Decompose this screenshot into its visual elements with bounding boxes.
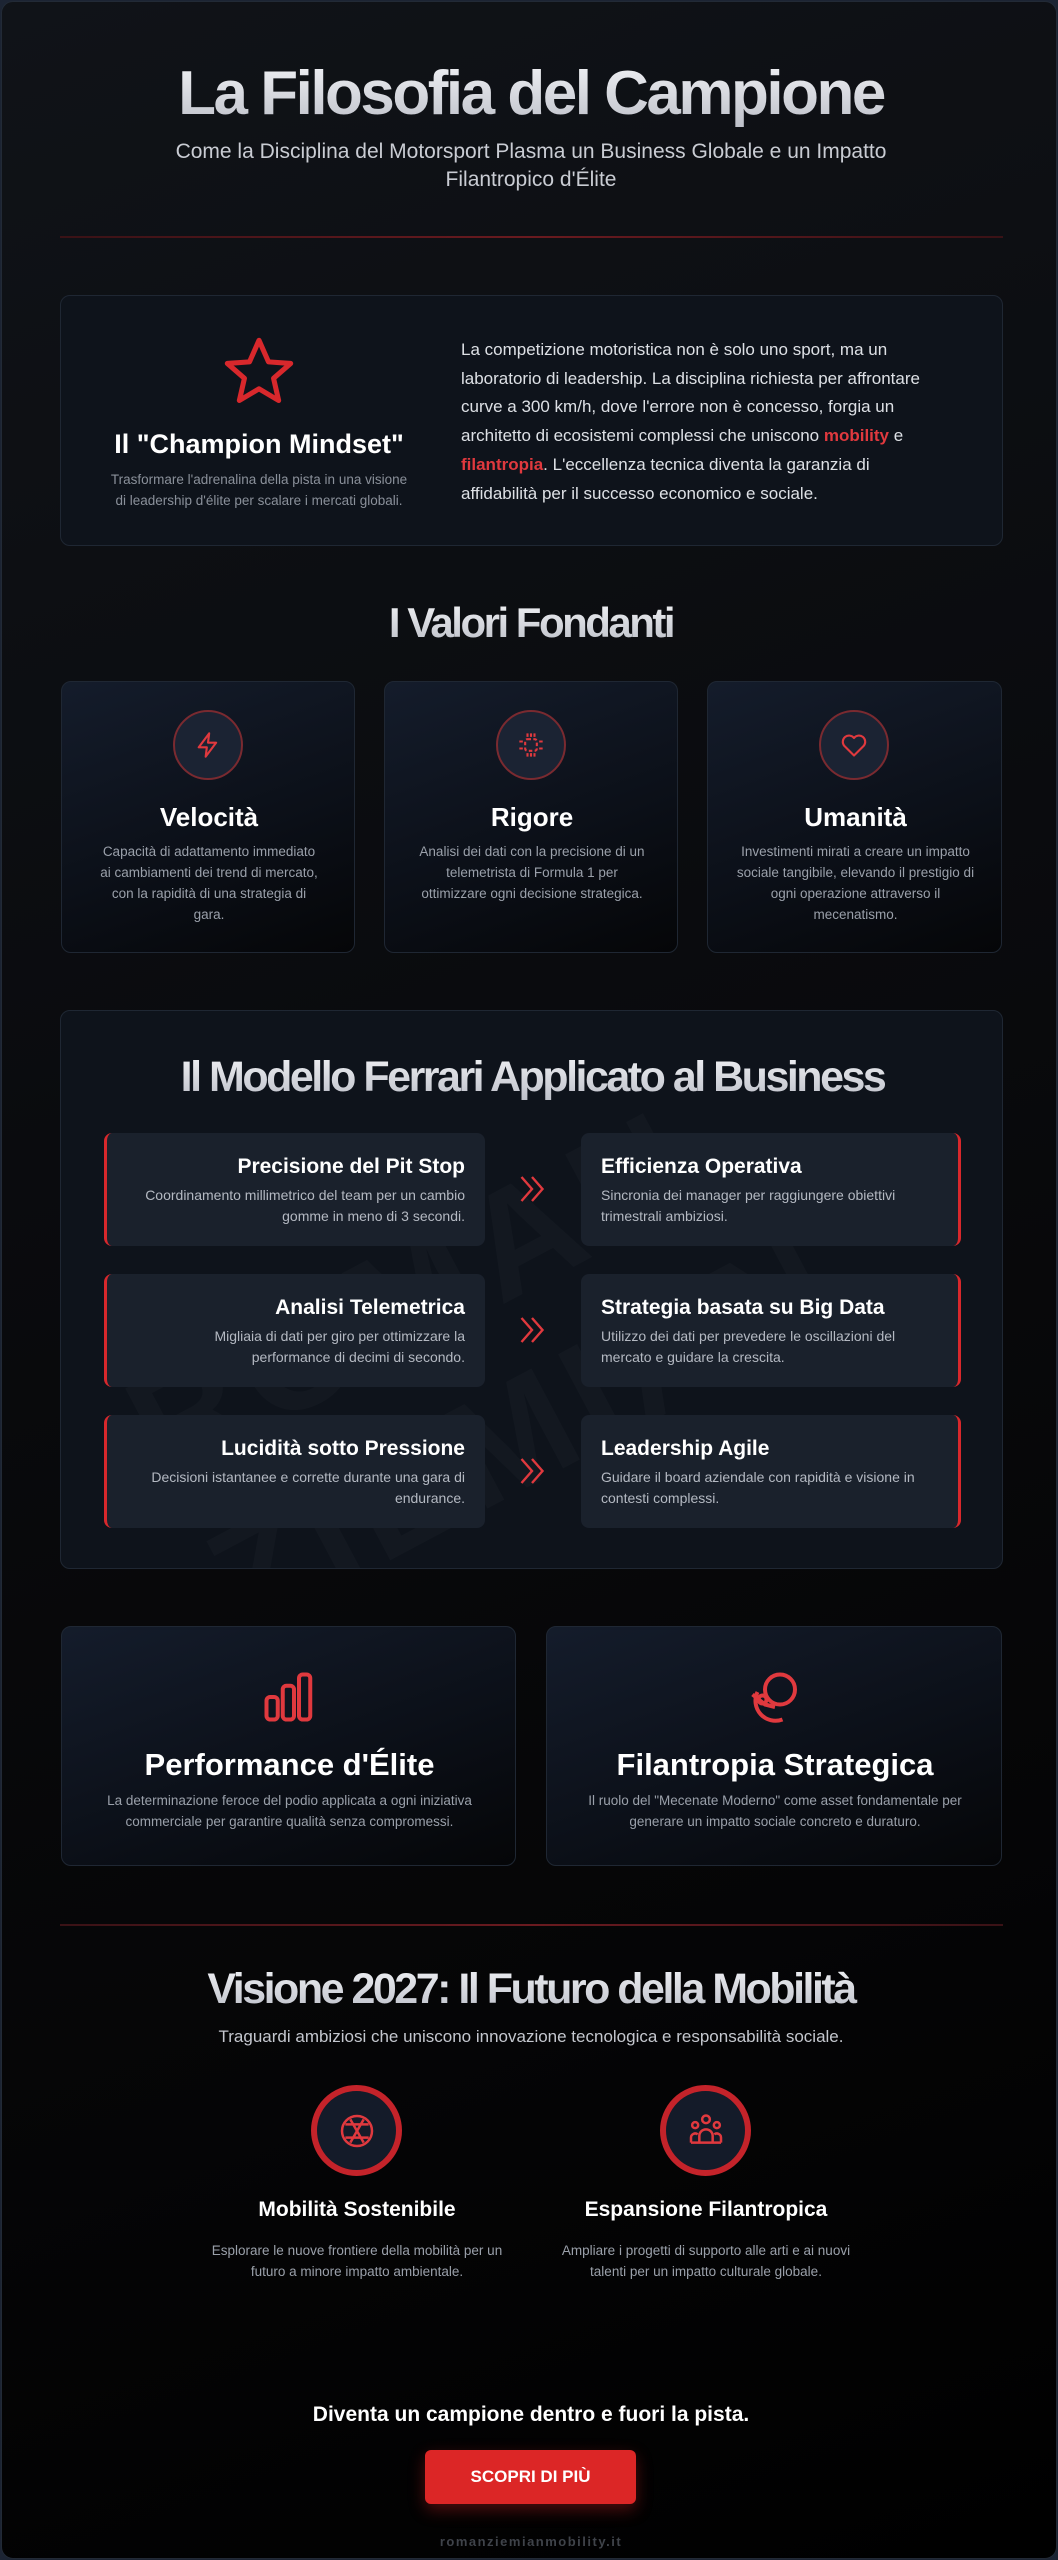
title xyxy=(2,56,1058,132)
subtitle: Come la Disciplina del Motorsport Plasma un Business Globale e un Impatto Filantropico d'Élite xyxy=(176,140,886,191)
icon: globe hand xyxy=(751,1672,797,1723)
title: La Filosofia del Campione xyxy=(178,59,884,128)
icon: heart xyxy=(819,710,889,780)
row 3 left: Decisioni istantanee e corrette durante una gara di endurance. xyxy=(151,1469,465,1506)
row 2 right: Utilizzo dei dati per prevedere le oscillazioni del mercato e guidare la crescita. xyxy=(601,1328,895,1365)
button: scopri di più xyxy=(425,2450,636,2504)
row 1 right: Efficienza Operativa xyxy=(601,1155,802,1178)
cta text: Diventa un campione dentro e fuori la pista. xyxy=(313,2403,749,2426)
icon circle xyxy=(660,2085,751,2176)
title: Rigore xyxy=(491,802,573,832)
title: Umanità xyxy=(804,802,907,832)
panel: rigore xyxy=(384,681,678,953)
desc: Esplorare le nuove frontiere della mobilità per un futuro a minore impatto ambientale. xyxy=(212,2243,502,2279)
row 3 left: Lucidità sotto Pressione xyxy=(221,1437,465,1460)
panel: umanità xyxy=(707,681,1002,953)
goal: mobilità sostenibile xyxy=(212,2085,502,2279)
row 2 right: Strategia basata su Big Data xyxy=(601,1296,885,1319)
arrow 3 xyxy=(520,1458,544,1484)
row 1 right xyxy=(581,1133,961,1246)
desc: Ampliare i progetti di supporto alle arti e ai nuovi talenti per un impatto culturale globale. xyxy=(562,2243,850,2279)
text: champion sub: Trasformare l'adrenalina della pista in una visione di leadership d'élite per scalare i mercati globali. xyxy=(111,472,407,508)
row 2 right xyxy=(581,1274,961,1387)
icon: bolt xyxy=(173,710,243,780)
panel: velocità xyxy=(61,681,355,953)
title: Performance d'Élite xyxy=(145,1747,434,1782)
row 3 left xyxy=(104,1415,485,1528)
heading: visione 2027: Visione 2027: Il Futuro della Mobilità xyxy=(207,1965,855,2013)
row 1 left xyxy=(104,1133,485,1246)
watermark xyxy=(100,1040,869,1668)
desc: La determinazione feroce del podio applicata a ogni iniziativa commerciale per garantire qualità senza compromessi. xyxy=(107,1793,472,1829)
heading: visione 2027 xyxy=(2,1963,1058,2015)
icon circle xyxy=(311,2085,402,2176)
title: Espansione Filantropica xyxy=(585,2198,827,2221)
arrow 1 xyxy=(520,1176,544,1202)
row 1 left: Precisione del Pit Stop xyxy=(237,1155,465,1178)
heading: valori: I Valori Fondanti xyxy=(389,599,673,646)
panel: modello ferrari xyxy=(60,1010,1003,1569)
title: Filantropia Strategica xyxy=(617,1747,933,1782)
text: champion body: La competizione motoristica non è solo uno sport, ma un laboratorio di leadership. La disciplina richiesta per affrontare curve a 300 km/h, dove l'errore non è concesso, forgia un architetto di ecosistemi complessi che uniscono mobility e filantropia. L'eccellenza tecnica diventa la garanzia di affidabilità per il successo economico e sociale. xyxy=(461,340,920,503)
title: Mobilità Sostenibile xyxy=(258,2198,456,2221)
row 3 right: Leadership Agile xyxy=(601,1437,769,1460)
row 3 right xyxy=(581,1415,961,1528)
watermark: ROMAN xyxy=(101,1075,724,1513)
goal: espansione filantropica xyxy=(562,2085,850,2279)
subtitle: visione: Traguardi ambiziosi che uniscono innovazione tecnologica e responsabilità sociale. xyxy=(219,2027,843,2046)
icon: cpu xyxy=(496,710,566,780)
row 2 left: Migliaia di dati per giro per ottimizzare la performance di decimi di secondo. xyxy=(214,1328,465,1365)
icon: bars xyxy=(264,1672,312,1722)
panel: performance xyxy=(61,1626,516,1866)
row 2 left: Analisi Telemetrica xyxy=(275,1296,465,1319)
arrow 2 xyxy=(520,1317,544,1343)
footer: romanziemianmobility.it xyxy=(440,2534,622,2549)
row 3 right: Guidare il board aziendale con rapidità e visione in contesti complessi. xyxy=(601,1469,915,1506)
heading: champion mindset: Il "Champion Mindset" xyxy=(114,429,404,459)
row 1 left: Coordinamento millimetrico del team per un cambio gomme in meno di 3 secondi. xyxy=(145,1187,465,1224)
desc: Capacità di adattamento immediato ai cambiamenti dei trend di mercato, con la rapidità di una strategia di gara. xyxy=(100,844,318,922)
desc: Analisi dei dati con la precisione di un telemetrista di Formula 1 per ottimizzare ogni decisione strategica. xyxy=(419,844,645,901)
title: Velocità xyxy=(160,802,258,832)
icon: star xyxy=(224,338,294,403)
desc: Investimenti mirati a creare un impatto sociale tangibile, elevando il prestigio di ogni operazione attraverso il mecenatismo. xyxy=(737,844,974,922)
heading: valori xyxy=(2,598,1058,648)
row 2 left xyxy=(104,1274,485,1387)
panel: filantropia xyxy=(546,1626,1002,1866)
button: scopri di più: SCOPRI DI PIÙ xyxy=(471,2467,590,2486)
desc: Il ruolo del "Mecenate Moderno" come asset fondamentale per generare un impatto sociale concreto e duraturo. xyxy=(588,1793,962,1829)
panel: champion mindset xyxy=(60,295,1003,546)
heading xyxy=(61,1051,1004,1103)
heading: Il Modello Ferrari Applicato al Business xyxy=(181,1053,884,1101)
row 1 right: Sincronia dei manager per raggiungere obiettivi trimestrali ambiziosi. xyxy=(601,1187,895,1224)
